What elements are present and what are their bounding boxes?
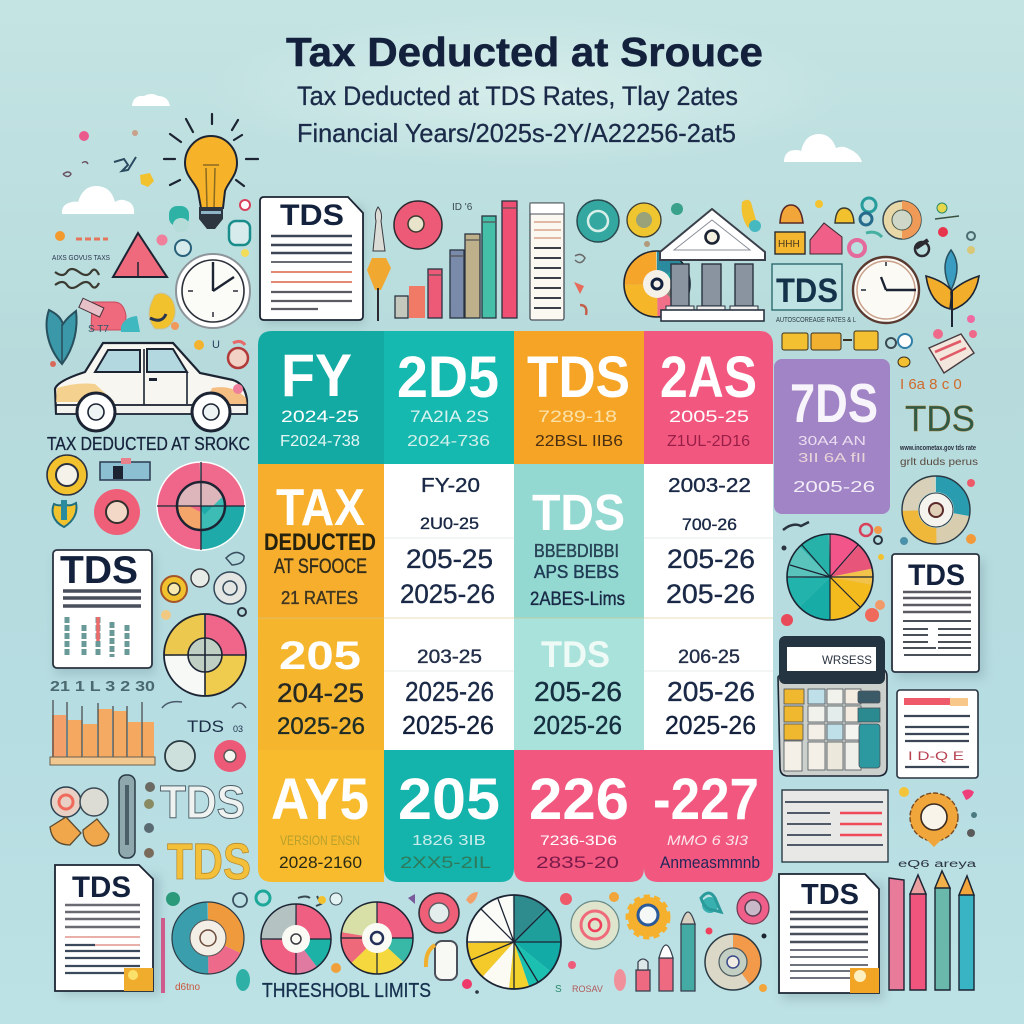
cell FY: 2024-25	[281, 407, 359, 426]
cell TDS light teal: TDS	[541, 634, 610, 675]
chart: pie right	[787, 534, 873, 620]
cell 206-25: 206-25	[678, 647, 740, 668]
icon: TDS document top	[260, 197, 364, 324]
cell 2003-22: 700-26	[682, 515, 737, 534]
label: outlined TDS right: TDS	[905, 398, 975, 439]
cell TDS light teal: 2025-26	[533, 710, 622, 740]
cell FY-20: 205-25	[406, 544, 493, 574]
cell 2D5: 2024-736	[407, 433, 490, 450]
title block	[286, 29, 763, 148]
cell 2AS: Z1UL-2D16	[667, 433, 750, 450]
cell TDS teal: 2ABES-Lims	[530, 589, 625, 610]
cell TDS orange	[527, 345, 630, 450]
cell 205 yellow: 204-25	[277, 678, 364, 708]
icon: TDS document left middle: TDS	[60, 549, 138, 592]
icon: TDS document top: TDS	[280, 199, 344, 232]
label: outlined TDS right: www.incometax.gov tds rate	[899, 445, 976, 452]
cell -227: MMO 6 3I3	[667, 832, 748, 848]
cell FY-20: 2U0-25	[420, 514, 479, 533]
subtitle line 1: Tax Deducted at TDS Rates, Tlay 2ates	[297, 81, 738, 111]
cell TDS orange: 7289-18	[538, 407, 617, 426]
cell 2D5: 2D5	[397, 345, 499, 410]
cell 203-25: 2025-26	[405, 676, 494, 707]
cell 203-25	[402, 647, 494, 740]
cell TAX DEDUCTED: TAX	[276, 479, 365, 537]
chart: rising bars	[395, 201, 517, 318]
label: outlined TDS right: grlt duds perus	[900, 457, 978, 468]
panel: purple TDS card: 3II 6A fII	[798, 450, 866, 465]
cell 2003-22	[666, 475, 755, 609]
row 2 cells	[258, 464, 773, 618]
small TDS label and rings: TDS	[187, 717, 224, 736]
cell FY-20	[400, 475, 495, 609]
chart: radial pie left	[157, 462, 245, 550]
cell FY-20: 2025-26	[400, 579, 495, 609]
cell AY5: AY5	[271, 767, 369, 832]
small doodles upper left: AIXS GOVUS TAXS	[52, 255, 110, 262]
cell 203-25: 203-25	[417, 647, 482, 668]
cell FY-20: FY-20	[421, 475, 480, 497]
table text row 3	[277, 634, 756, 740]
cell 206-25: 2025-26	[665, 710, 756, 740]
icon: small ring and cup	[419, 893, 459, 980]
cell 226: 226	[529, 767, 629, 832]
icon: calculator	[778, 636, 887, 776]
cell -227: Anmeasmmnb	[660, 853, 760, 872]
subtitle line 2: Financial Years/2025s-2Y/A22256-2at5	[297, 118, 736, 148]
cell 205 yellow	[277, 634, 365, 740]
panel: purple TDS card	[774, 359, 890, 514]
bottom doodles: ROSAV	[572, 984, 603, 994]
cell TDS teal: TDS	[532, 484, 625, 541]
chart: small bars bottom	[636, 912, 695, 991]
icon: clock left	[176, 254, 250, 328]
icon: clock right	[853, 257, 919, 323]
panel: purple TDS card: 2005-26	[793, 479, 875, 496]
cell 205 yellow: 2025-26	[277, 713, 365, 740]
cell 2D5: 7A2IA 2S	[410, 407, 489, 426]
cell 206-25: 205-26	[667, 676, 755, 707]
small doodles upper right	[775, 198, 975, 256]
chart: pie bottom 1	[261, 904, 331, 974]
icon: pink ring	[394, 201, 473, 249]
car caption: TAX DEDUCTED AT SROKC	[47, 434, 250, 454]
label: TDS box right: TDS	[776, 272, 838, 310]
cell 206-25	[665, 647, 756, 740]
cell FY: F2024-738	[280, 433, 360, 450]
title: Tax Deducted at Srouce	[286, 29, 763, 75]
cell 205 teal: 2XX5-2IL	[400, 853, 491, 872]
cell -227	[653, 767, 760, 872]
cell -227: -227	[653, 767, 759, 832]
chart: pie bottom 2	[341, 902, 413, 974]
icon: light bulb	[164, 114, 258, 229]
icon: ring bottom right	[701, 892, 769, 924]
small doodles upper left: U	[212, 339, 220, 351]
chart: orange bar chart	[50, 678, 155, 765]
cell TAX DEDUCTED	[264, 479, 376, 608]
icon: gear badge	[898, 787, 977, 870]
label: yellow strip	[782, 331, 878, 350]
small doodles upper right: HHH	[778, 239, 800, 250]
label: outlined TDS right	[899, 376, 978, 468]
icon: locks and pen	[50, 775, 155, 858]
cell 2D5	[397, 345, 499, 450]
cell AY5	[271, 767, 369, 872]
cell 226: 7236-3D6	[540, 832, 617, 848]
cell 2003-22: 205-26	[667, 544, 755, 574]
icon: building	[100, 458, 150, 480]
icon: red header document	[897, 690, 978, 778]
small rings middle left	[161, 552, 246, 620]
label: outlined TDS: TDS	[160, 776, 245, 828]
icon: pink ring: ID '6	[452, 202, 473, 213]
panel: purple TDS card: 7DS	[790, 372, 878, 434]
icon: swirl	[571, 901, 619, 949]
icon: gear	[628, 897, 668, 937]
row 3 cells	[258, 618, 773, 750]
icon: TDS document right	[892, 554, 984, 678]
cell FY	[280, 342, 360, 450]
icon: calculator: WRSESS	[822, 653, 872, 667]
chart: donut right	[902, 476, 970, 544]
icon: warning triangle	[113, 233, 167, 277]
icon: TDS document left middle	[53, 549, 155, 674]
cell 2003-22: 205-26	[666, 579, 755, 609]
label: yellow TDS: TDS	[167, 833, 251, 890]
cell TDS light teal: 205-26	[534, 676, 622, 707]
cell 226: 2835-20	[536, 853, 619, 872]
table text row 2	[264, 475, 755, 610]
cell 2003-22: 2003-22	[668, 475, 751, 497]
cell TAX DEDUCTED: 21 RATES	[281, 588, 358, 608]
panel: striped table right	[782, 790, 888, 862]
small doodles around pie right	[781, 479, 976, 626]
bottom doodles	[256, 891, 767, 995]
icon: striped table	[530, 203, 564, 320]
icon: coin	[47, 455, 87, 495]
icon: flower and leaf	[53, 489, 140, 535]
cell TAX DEDUCTED: DEDUCTED	[264, 529, 376, 556]
icon: car	[55, 343, 247, 431]
icon: gear badge: eQ6 areya	[898, 859, 977, 870]
chart: orange bar chart: 21 1 L 3 2 30	[50, 678, 155, 695]
small doodles upper left	[50, 130, 250, 368]
cell TDS teal: APS BEBS	[534, 562, 619, 582]
cell TDS orange: 22BSL IIB6	[535, 433, 623, 450]
chart: pie top	[624, 251, 690, 317]
cell TDS teal: BBEBDIBBI	[534, 541, 619, 561]
row 1 cells	[258, 331, 773, 464]
icon: brush	[367, 207, 391, 321]
cell AY5: VERSION ENSN	[280, 832, 360, 848]
label: TDS box right: AUTOSCOREAGE RATES & L	[776, 317, 856, 324]
cell 205 teal: 205	[398, 767, 500, 832]
cell TDS light teal	[533, 634, 622, 740]
small TDS label and rings: 03	[233, 724, 243, 734]
doodles and icon: books	[886, 329, 977, 373]
icons: pencils	[889, 871, 974, 990]
cell 205 yellow: 205	[279, 634, 361, 678]
chart: donut bottom right	[705, 934, 761, 990]
cell 2AS	[660, 345, 757, 450]
table cells	[258, 331, 773, 882]
label: outlined TDS right: I 6a 8 c 0	[900, 376, 962, 393]
cell FY: FY	[281, 342, 352, 409]
cell 2AS: 2AS	[660, 345, 757, 410]
small doodles bottom left: d6tno	[175, 982, 200, 993]
icon: bank building	[660, 209, 765, 321]
cell 205 teal	[398, 767, 500, 872]
small doodles bottom left	[166, 892, 250, 993]
cell 226	[529, 767, 629, 872]
icon: TDS document right: TDS	[908, 559, 965, 592]
small TDS label and rings	[162, 702, 246, 772]
panel: purple TDS card: 30A4 AN	[798, 433, 866, 448]
icon: TDS document bottom left	[55, 865, 165, 995]
cell TAX DEDUCTED: AT SFOOCE	[274, 555, 367, 578]
icons: teal and yellow rings	[574, 200, 761, 315]
row 4 cells	[258, 750, 773, 882]
chart: large pie	[467, 895, 561, 989]
icon: leaf left	[47, 310, 77, 364]
icon: red header document: I D-Q E	[908, 749, 964, 763]
icon: leaf right	[926, 250, 979, 327]
icon: TDS document bottom right: TDS	[801, 879, 859, 911]
cell TDS orange: TDS	[527, 345, 630, 410]
cell 2AS: 2005-25	[669, 407, 749, 426]
small doodles upper left: S T7	[88, 324, 109, 335]
table text row 4	[271, 767, 760, 872]
chart: donut bottom left	[172, 902, 244, 974]
table text row 1	[280, 342, 757, 450]
cell TDS teal	[530, 484, 625, 610]
label: TDS box right	[772, 264, 856, 324]
footer label: THRESHOBL LIMITS	[262, 980, 431, 1002]
cell 203-25: 2025-26	[402, 710, 494, 740]
icon: TDS document bottom left: TDS	[72, 871, 131, 904]
cell AY5: 2028-2160	[279, 853, 362, 872]
bottom doodles: S	[555, 984, 562, 995]
clouds	[62, 94, 862, 214]
cell 205 teal: 1826 3IB	[412, 832, 486, 849]
icon: TDS document bottom right	[779, 874, 884, 1000]
chart: wheel pie	[164, 614, 246, 696]
